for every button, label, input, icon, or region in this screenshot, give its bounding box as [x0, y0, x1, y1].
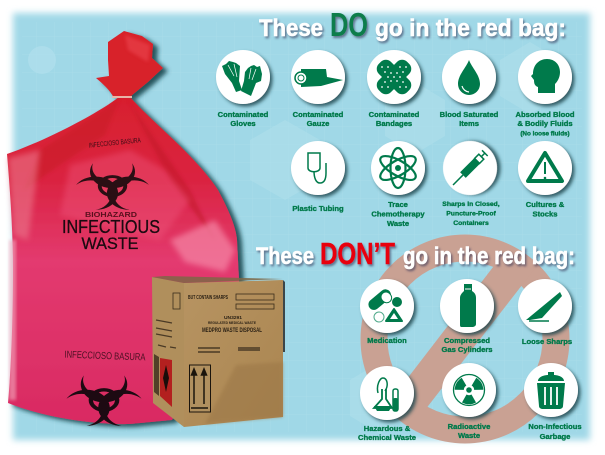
icon: medication [360, 279, 414, 333]
icon: chemical flask [360, 366, 414, 420]
bag print: upper biohazard symbol [75, 163, 150, 212]
bag body [7, 97, 240, 424]
label: contaminated bandages: Bandages [376, 119, 412, 128]
box left face [152, 277, 184, 427]
label: absorbed blood and bodily fluids: Absorbed Blood [515, 110, 575, 119]
box printed text: UN3291 [224, 315, 243, 320]
label: hazardous and chemical waste: Chemical Waste [358, 433, 416, 442]
box printed text: MEDPRO WASTE DISPOSAL [202, 327, 262, 334]
label: trace chemotherapy waste: Trace [388, 200, 408, 209]
label: plastic tubing: Plastic Tubing [292, 204, 344, 213]
label: contaminated bandages: Contaminated [369, 110, 419, 119]
cardboard box [152, 276, 285, 427]
icon: blood drop [442, 50, 496, 104]
label: non-infectious garbage: Garbage [540, 432, 570, 441]
label: sharps in closed containers: Containers [453, 220, 489, 227]
icon: radiation [442, 363, 496, 417]
bag print: text [62, 137, 160, 363]
icon: bandages [367, 50, 421, 104]
bag print: text: BIOHAZARD [85, 210, 138, 219]
label: compressed gas cylinders: Gas Cylinders [441, 345, 493, 354]
label: absorbed blood and bodily fluids: (No loose fluids) [520, 130, 570, 138]
box printed text: REGULATED MEDICAL WASTE [208, 321, 257, 325]
label: non-infectious garbage: Non-Infectious [528, 422, 582, 431]
title: these do: These [259, 15, 323, 42]
label: contaminated gauze: Contaminated [293, 110, 343, 119]
label: contaminated gloves: Contaminated [218, 110, 268, 119]
label: contaminated gloves: Gloves [230, 119, 256, 128]
bag print: lower biohazard symbol [65, 375, 143, 428]
box front face [184, 280, 283, 427]
label: absorbed blood and bodily fluids: & Bodily Fluids [517, 119, 573, 128]
bag print: text: INFECCIOSO BASURA [89, 137, 141, 150]
icon: scalpel [518, 279, 572, 333]
label: blood saturated items: Items [459, 119, 479, 128]
box orientation arrows [190, 365, 210, 412]
icon: gauze [291, 50, 345, 104]
icon: gloves [216, 50, 270, 104]
prohibition sign [374, 248, 556, 430]
icon: warning triangle [518, 141, 572, 195]
label: cultures and stocks: Stocks [533, 210, 557, 218]
label: radioactive waste: Waste [458, 431, 480, 440]
title: these do: go in the red bag: [375, 15, 566, 42]
box top flap [152, 276, 283, 283]
label: loose sharps: Loose Sharps [522, 337, 572, 346]
label: compressed gas cylinders: Compressed [444, 336, 490, 345]
box printed text: BUT CONTAIN SHARPS [188, 295, 228, 301]
label: sharps in closed containers: Sharps in Closed, [442, 201, 500, 208]
label: sharps in closed containers: Puncture-Proof [446, 210, 496, 218]
icon: atom [371, 141, 425, 195]
label: contaminated gauze: Gauze [307, 119, 329, 128]
bag print: text: INFECTIOUS [62, 217, 160, 237]
bag top knot [96, 31, 163, 98]
box shadow [283, 280, 285, 352]
title: these don't: go in the red bag: [403, 243, 575, 270]
bag print: text: WASTE [82, 234, 138, 253]
title: these don't [256, 236, 575, 271]
icon: trash can [524, 363, 578, 417]
bag print: text: INFECCIOSO BASURA [64, 350, 146, 363]
icon: syringe [432, 130, 508, 206]
icon: plastic tubing [291, 141, 345, 195]
title: these do [259, 6, 566, 43]
label: medication: Medication [367, 336, 407, 345]
label: radioactive waste: Radioactive [448, 422, 490, 431]
box red label [154, 354, 172, 407]
title: these don't: DON’T [320, 236, 395, 271]
bag folds and highlights [8, 35, 235, 400]
label: trace chemotherapy waste: Chemotherapy [371, 210, 425, 218]
label: hazardous and chemical waste: Hazardous & [364, 424, 410, 433]
icon: head [518, 50, 572, 104]
title: these do: DO [330, 6, 368, 43]
title: these don't: These [256, 243, 314, 270]
icon: gas cylinder [440, 279, 494, 333]
label: cultures and stocks: Cultures & [526, 200, 564, 209]
label: blood saturated items: Blood Saturated [440, 110, 498, 119]
box printed text [188, 295, 262, 334]
label: trace chemotherapy waste: Waste [387, 219, 409, 228]
red biohazard bag [7, 31, 240, 424]
